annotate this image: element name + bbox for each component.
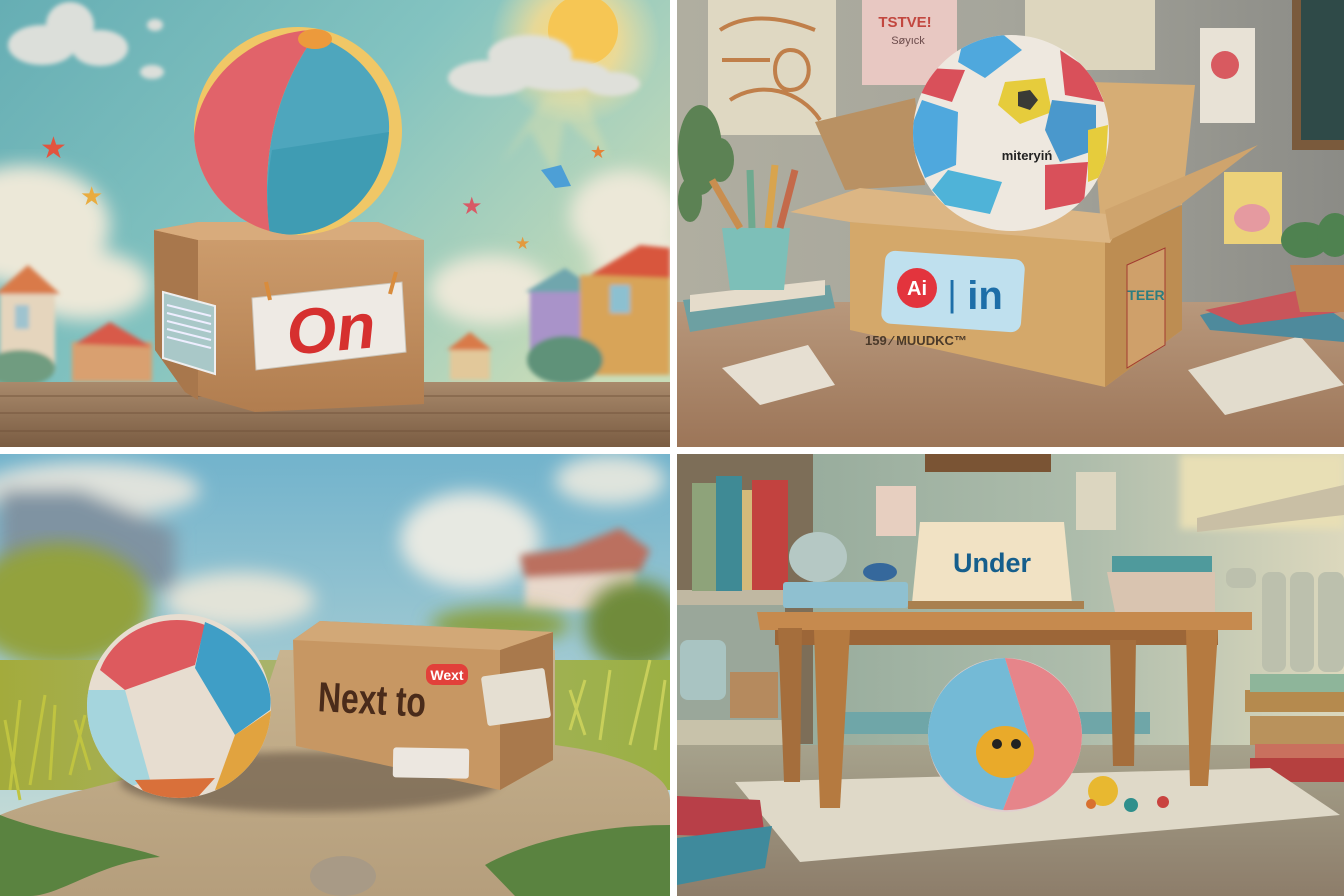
shadow: [120, 752, 500, 812]
soccer ball: next to: [86, 614, 272, 800]
floor: [677, 745, 1344, 896]
gem: [541, 165, 571, 188]
sun disc: [548, 0, 618, 65]
right meadow grass: [570, 660, 665, 750]
books left and pencil cup: [683, 165, 835, 332]
panel: ball under the table: [677, 454, 1344, 896]
stars: ★: [515, 234, 530, 253]
items on the table: [783, 532, 1215, 612]
wall: [677, 454, 1344, 896]
sign: under: [908, 522, 1084, 609]
stone: [310, 856, 376, 896]
cardboard box: [154, 222, 424, 412]
sun glow: [494, 0, 655, 118]
note top: [1025, 0, 1155, 70]
poster pink: [862, 0, 957, 85]
stars: [40, 132, 606, 253]
cloud near the sun: [448, 35, 640, 96]
right side sticker: [1127, 248, 1165, 368]
window sill: [1197, 485, 1344, 532]
meadow: [0, 660, 670, 790]
sign: On: On: [284, 289, 378, 369]
sign: under: Under: [953, 548, 1031, 578]
poster pink: Søyıck: [891, 35, 925, 47]
right books and plant: [1200, 213, 1344, 342]
sign: On: [252, 282, 406, 370]
bookshelf: [677, 454, 813, 745]
beach ball: [194, 27, 402, 235]
distant clouds: [0, 165, 690, 325]
blurred clouds and building: [0, 455, 665, 628]
chalkboard: [1292, 0, 1344, 150]
robot note: [1200, 28, 1255, 123]
face: [976, 726, 1034, 778]
box label: Ai in: [881, 250, 1025, 333]
ground foliage bottom: [0, 815, 670, 896]
radiator: [1226, 568, 1344, 672]
wext badge: [426, 664, 468, 685]
papers on the desk: [722, 336, 1344, 415]
transparent ball: [928, 658, 1082, 812]
panel: ball on the box: [0, 0, 690, 447]
ground path: [0, 650, 670, 896]
wall shelf and pictures: [876, 454, 1116, 536]
wext badge: Wext: [430, 667, 464, 683]
table: [757, 612, 1252, 808]
sky: [0, 454, 670, 815]
box in panel: [790, 82, 1258, 387]
sun rays: [514, 96, 606, 168]
panel: ball next to the box: [0, 454, 685, 896]
poster left: [708, 0, 836, 135]
box label: Ai in: |: [947, 273, 957, 314]
window light: [1180, 454, 1344, 529]
baseboard: [820, 712, 1150, 734]
pins: [266, 272, 396, 300]
side label: [163, 292, 215, 374]
small balls: [1086, 776, 1169, 812]
box label: Ai in: in: [967, 274, 1003, 318]
box: next to: [293, 621, 553, 790]
cloud top left: [8, 2, 164, 79]
stars: ★: [590, 142, 606, 162]
ball text: miteryiń: [1002, 148, 1052, 163]
right side sticker: TEER: [1127, 287, 1165, 303]
panel: ball in the box: [677, 0, 1344, 447]
plant left: [678, 105, 734, 222]
houses right: [447, 245, 670, 384]
rug: [735, 768, 1340, 862]
stars: ★: [40, 132, 67, 165]
sky background: [0, 0, 670, 382]
wooden table: [0, 382, 670, 447]
ball emblem: [1018, 90, 1038, 110]
blurred house: [520, 528, 650, 610]
desk: [677, 302, 1344, 447]
shelf items: [677, 640, 785, 745]
houses left: [0, 265, 152, 386]
text: next to: Next to: [317, 673, 427, 726]
side label: [481, 668, 551, 726]
left floor books: [677, 796, 772, 885]
stars: ★: [461, 193, 483, 220]
yellow note: [1224, 172, 1282, 244]
stars: ★: [80, 181, 103, 211]
wall: [677, 0, 1344, 302]
trees background: [0, 543, 685, 670]
poster pink: TSTVE!: [878, 14, 932, 31]
bottom label: [393, 747, 469, 779]
soccer ball: [908, 32, 1109, 231]
right book stack: [1245, 674, 1344, 782]
box label: Ai in: Ai: [907, 278, 927, 300]
box small text: 159 ⁄ MUUDKC™: [865, 333, 967, 348]
left meadow grass: [5, 695, 90, 800]
